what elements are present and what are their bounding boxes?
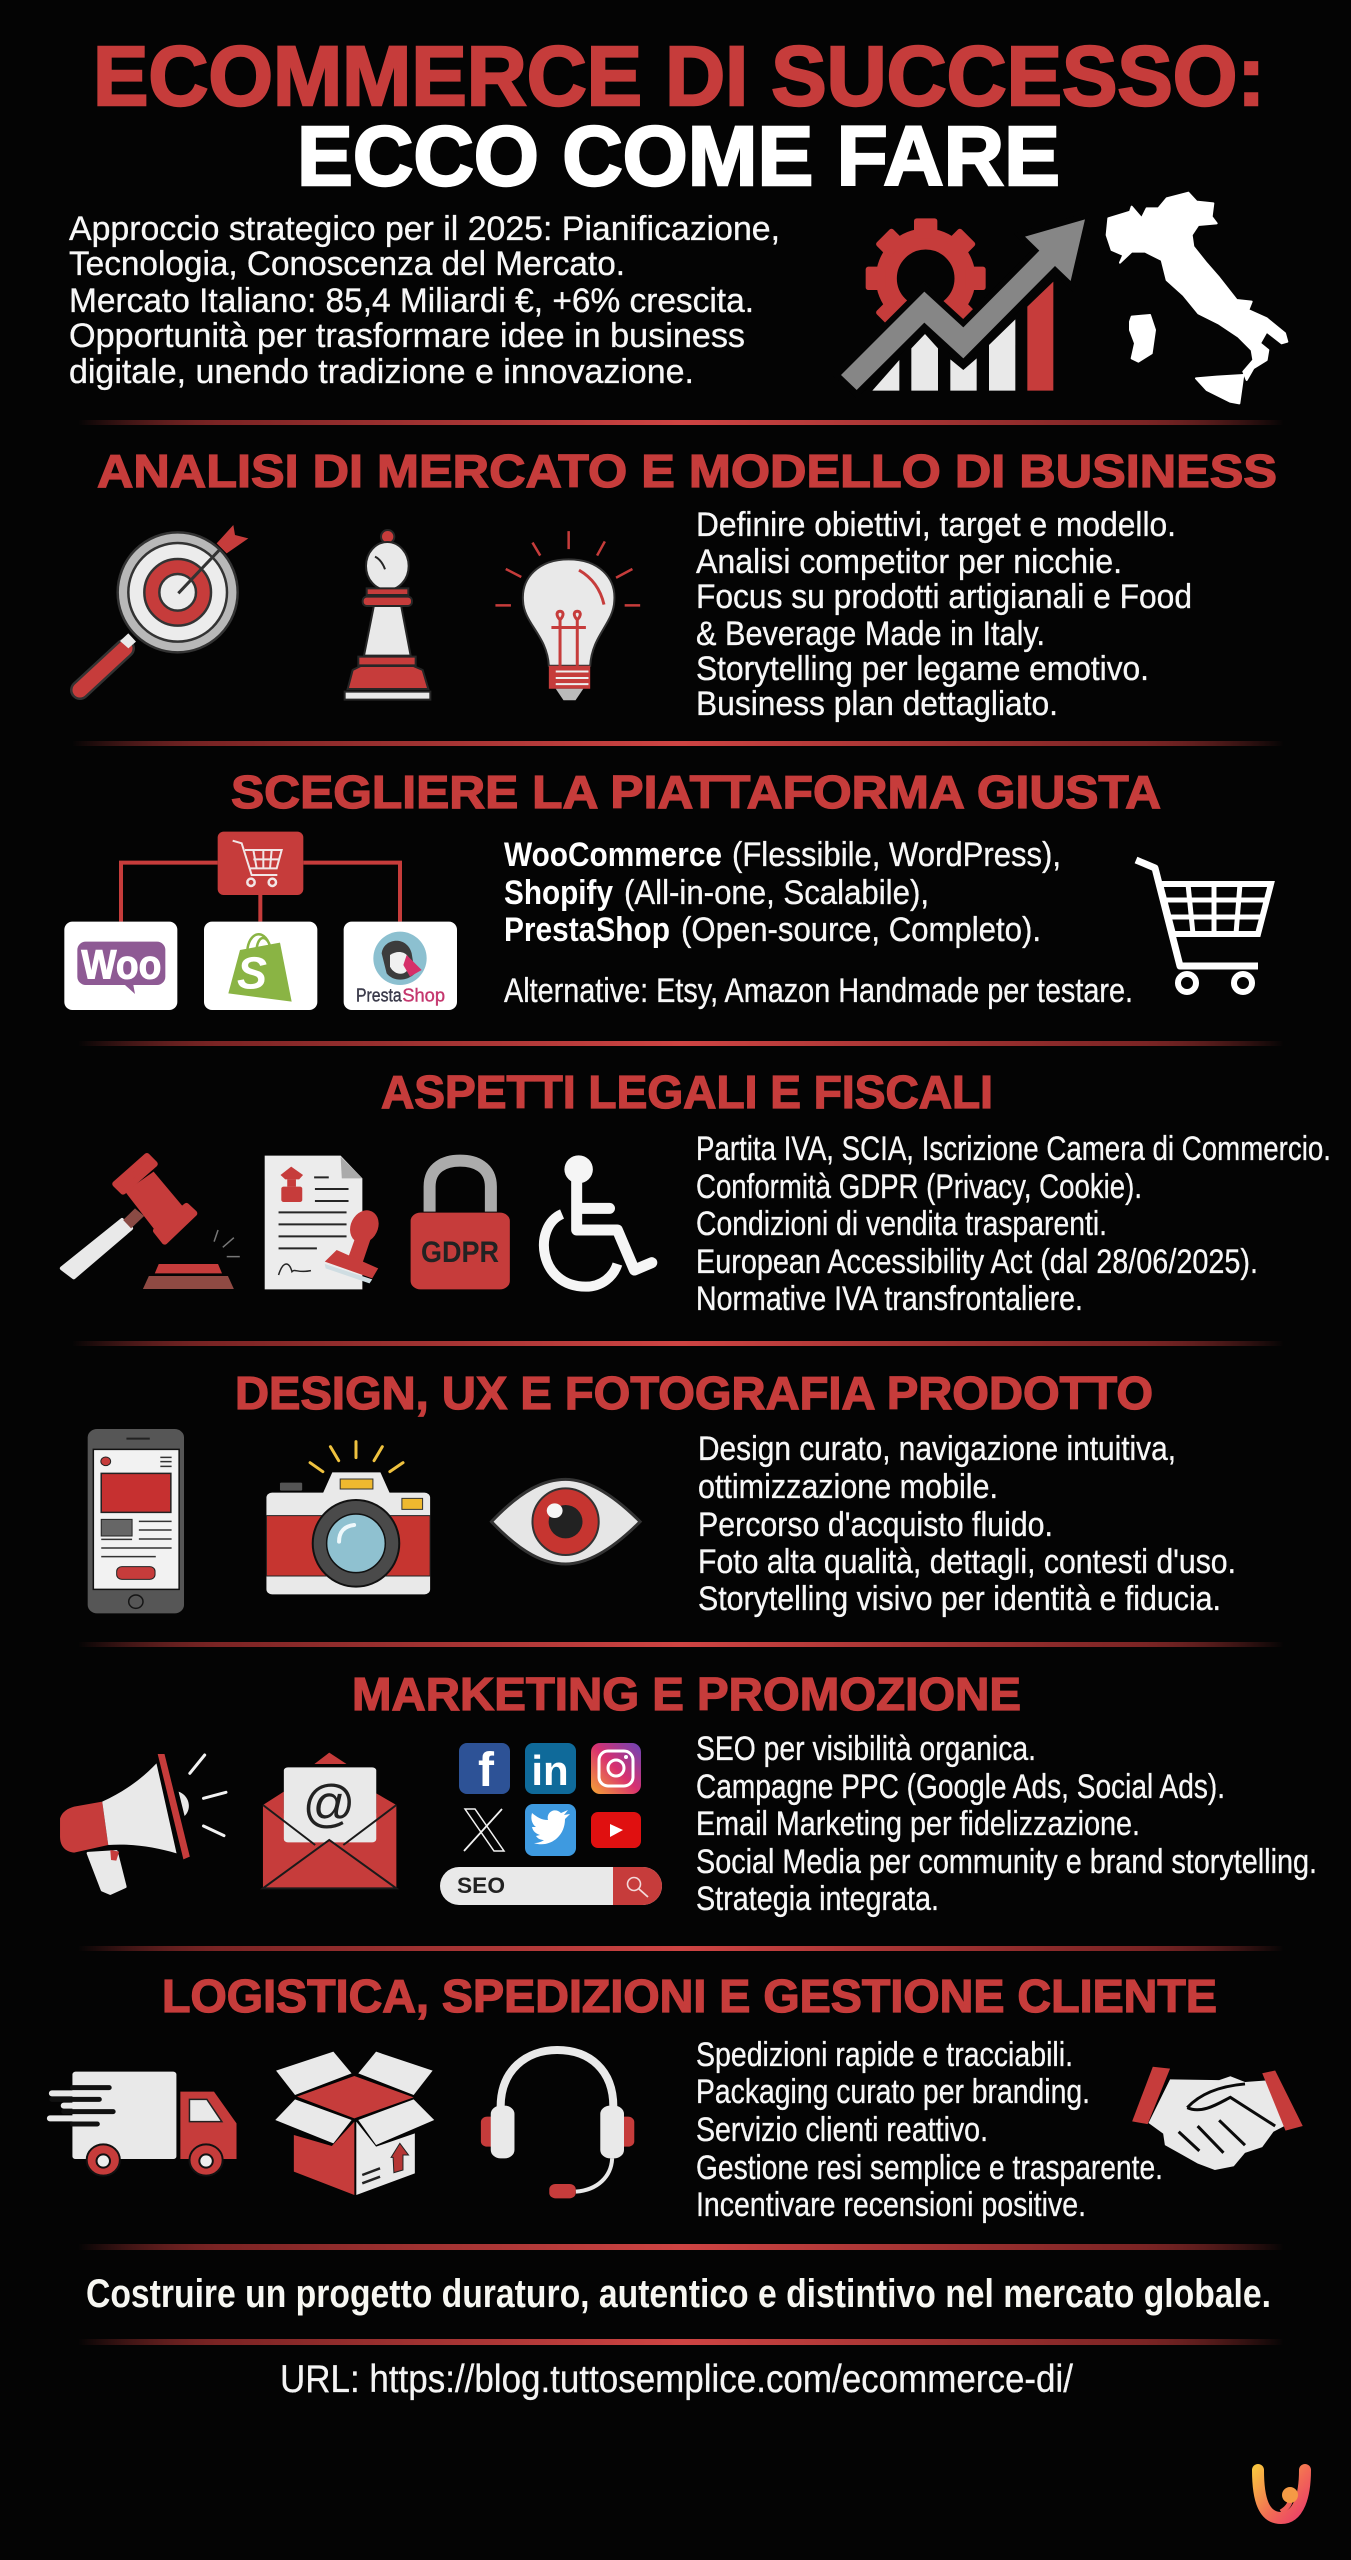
text block: design: Foto alta qualità, dettagli, contesti d'uso. <box>698 1543 1236 1581</box>
heading: analisi di mercato: ANALISI DI MERCATO E MODELLO DI BUSINESS <box>97 445 1277 497</box>
intro text block: Opportunità per trasformare idee in business <box>69 317 745 355</box>
title: ECOMMERCE DI SUCCESSO: <box>93 29 1265 123</box>
icon: email envelope: @ <box>303 1775 355 1833</box>
icon: chess bishop <box>345 530 430 700</box>
text block: legali: Condizioni di vendita trasparenti. <box>696 1205 1107 1243</box>
text block: marketing: Strategia integrata. <box>696 1880 939 1918</box>
icon: map of Italy <box>1107 193 1287 403</box>
text block: design: Design curato, navigazione intuitiva, <box>698 1430 1176 1468</box>
text block: piattaforme: PrestaShop <box>504 911 670 949</box>
heading: marketing: MARKETING E PROMOZIONE <box>352 1668 1021 1720</box>
text block: logistica: Gestione resi semplice e trasparente. <box>696 2149 1163 2187</box>
icon: twitter <box>525 1804 576 1856</box>
icon: GDPR padlock <box>411 1161 510 1289</box>
icon: smartphone <box>88 1429 184 1613</box>
logo card: PrestaShop: Presta <box>356 985 402 1006</box>
text block: marketing: Campagne PPC (Google Ads, Social Ads). <box>696 1768 1225 1806</box>
text block: analisi: Definire obiettivi, target e modello. <box>696 506 1176 544</box>
heading: aspetti legali: ASPETTI LEGALI E FISCALI <box>381 1066 993 1118</box>
icon: email envelope <box>263 1753 396 1889</box>
divider <box>78 2339 1284 2345</box>
heading: logistica: LOGISTICA, SPEDIZIONI E GESTIONE CLIENTE <box>162 1970 1217 2022</box>
divider <box>78 2244 1284 2250</box>
text block: legali: Normative IVA transfrontaliere. <box>696 1280 1083 1318</box>
icon: open box <box>275 2052 434 2195</box>
search bar: SEO <box>440 1867 662 1905</box>
panel: logistica <box>50 1970 1303 2224</box>
logo card: Shopify <box>204 922 317 1010</box>
text block: piattaforme <box>504 836 1133 1010</box>
icon: linkedin: in <box>531 1747 569 1794</box>
icon: facebook: f <box>478 1744 495 1797</box>
icon: megaphone <box>60 1754 226 1893</box>
text block: logistica: Servizio clienti reattivo. <box>696 2111 988 2149</box>
text block: piattaforme: Alternative: Etsy, Amazon Handmade per testare. <box>504 972 1133 1010</box>
text block: marketing: SEO per visibilità organica. <box>696 1730 1036 1768</box>
text block: logistica: Packaging curato per branding. <box>696 2073 1090 2111</box>
icon: GDPR padlock: GDPR <box>421 1236 499 1269</box>
text block: legali: European Accessibility Act (dal 28/06/2025). <box>696 1243 1258 1281</box>
text block: analisi <box>696 506 1192 723</box>
text block: piattaforme: (Open-source, Completo). <box>681 911 1041 949</box>
text block: piattaforme: (All-in-one, Scalabile), <box>624 874 929 912</box>
icon: target magnifier <box>80 525 248 690</box>
icon: gavel <box>62 1156 240 1289</box>
text block: legali <box>696 1130 1331 1318</box>
text block: analisi: Business plan dettagliato. <box>696 685 1058 723</box>
icon: youtube <box>591 1812 641 1848</box>
panel: marketing <box>60 1668 1317 1918</box>
text block: design: ottimizzazione mobile. <box>698 1468 998 1506</box>
panel: design <box>88 1367 1236 1618</box>
intro text block: Tecnologia, Conoscenza del Mercato. <box>69 245 625 283</box>
search bar: SEO: SEO <box>457 1873 505 1898</box>
icon: light bulb <box>495 531 640 700</box>
logo card: PrestaShop <box>344 922 457 1010</box>
social icons and SEO bar <box>440 1743 662 1905</box>
text block: logistica: Spedizioni rapide e tracciabili. <box>696 2036 1073 2074</box>
icon: document with stamp <box>265 1156 383 1289</box>
logo card: Shopify: S <box>237 947 267 998</box>
logo card: WooCommerce <box>64 922 177 1010</box>
icon: linkedin <box>525 1743 576 1794</box>
icon: headset <box>481 2050 634 2198</box>
title <box>93 29 1265 203</box>
text block: analisi: & Beverage Made in Italy. <box>696 615 1045 653</box>
divider <box>78 1946 1284 1951</box>
icon: handshake <box>1132 2067 1303 2170</box>
text block: design: Storytelling visivo per identità e fiducia. <box>698 1580 1221 1618</box>
icon: gear and growth chart <box>841 218 1085 393</box>
text block: analisi: Focus su prodotti artigianali e Food <box>696 578 1192 616</box>
text block: piattaforme: WooCommerce <box>504 836 722 874</box>
divider <box>78 420 1284 425</box>
icon: delivery truck <box>50 2072 237 2176</box>
icon: wheelchair <box>544 1155 652 1287</box>
text block: legali: Conformità GDPR (Privacy, Cookie). <box>696 1168 1142 1206</box>
intro text block: Mercato Italiano: 85,4 Miliardi €, +6% crescita. <box>69 282 754 320</box>
icon: instagram <box>591 1743 641 1794</box>
icon: cart in red box <box>218 832 303 895</box>
platform diagram <box>64 832 457 1010</box>
panel: analisi di mercato <box>80 445 1277 723</box>
icon: shopping cart <box>1136 860 1271 992</box>
intro text block <box>69 210 780 391</box>
divider <box>78 1041 1284 1046</box>
intro text block: digitale, unendo tradizione e innovazione. <box>69 353 694 391</box>
divider <box>72 1341 1284 1346</box>
icon: X <box>464 1809 504 1851</box>
panel: aspetti legali <box>62 1066 1331 1318</box>
divider <box>72 741 1284 746</box>
divider <box>78 1642 1284 1647</box>
text block: design: Percorso d'acquisto fluido. <box>698 1506 1053 1544</box>
text block: marketing <box>696 1730 1317 1918</box>
logo card: WooCommerce: Woo <box>81 942 161 988</box>
text block: logistica <box>696 2036 1163 2224</box>
icon: camera <box>266 1442 430 1594</box>
panel: piattaforma <box>64 766 1271 1010</box>
text block: marketing: Email Marketing per fidelizzazione. <box>696 1805 1140 1843</box>
icon: eye <box>491 1479 640 1564</box>
text block: analisi: Analisi competitor per nicchie. <box>696 543 1122 581</box>
heading: design: DESIGN, UX E FOTOGRAFIA PRODOTTO <box>235 1367 1153 1419</box>
heading: piattaforma: SCEGLIERE LA PIATTAFORMA GIUSTA <box>231 766 1161 818</box>
text block: analisi: Storytelling per legame emotivo. <box>696 650 1149 688</box>
text block: piattaforme: (Flessibile, WordPress), <box>732 836 1061 874</box>
intro text block: Approccio strategico per il 2025: Pianificazione, <box>69 210 780 248</box>
icon: facebook <box>459 1743 510 1797</box>
text block: piattaforme: Shopify <box>504 874 613 912</box>
text block: design <box>698 1430 1236 1618</box>
source URL: URL: https://blog.tuttosemplice.com/ecommerce-di/ <box>280 2358 1073 2401</box>
logo card: PrestaShop: Shop <box>402 985 445 1006</box>
text block: logistica: Incentivare recensioni positive. <box>696 2186 1086 2224</box>
icon: brand logo <box>1258 2470 1305 2518</box>
title: ECCO COME FARE <box>297 109 1060 203</box>
